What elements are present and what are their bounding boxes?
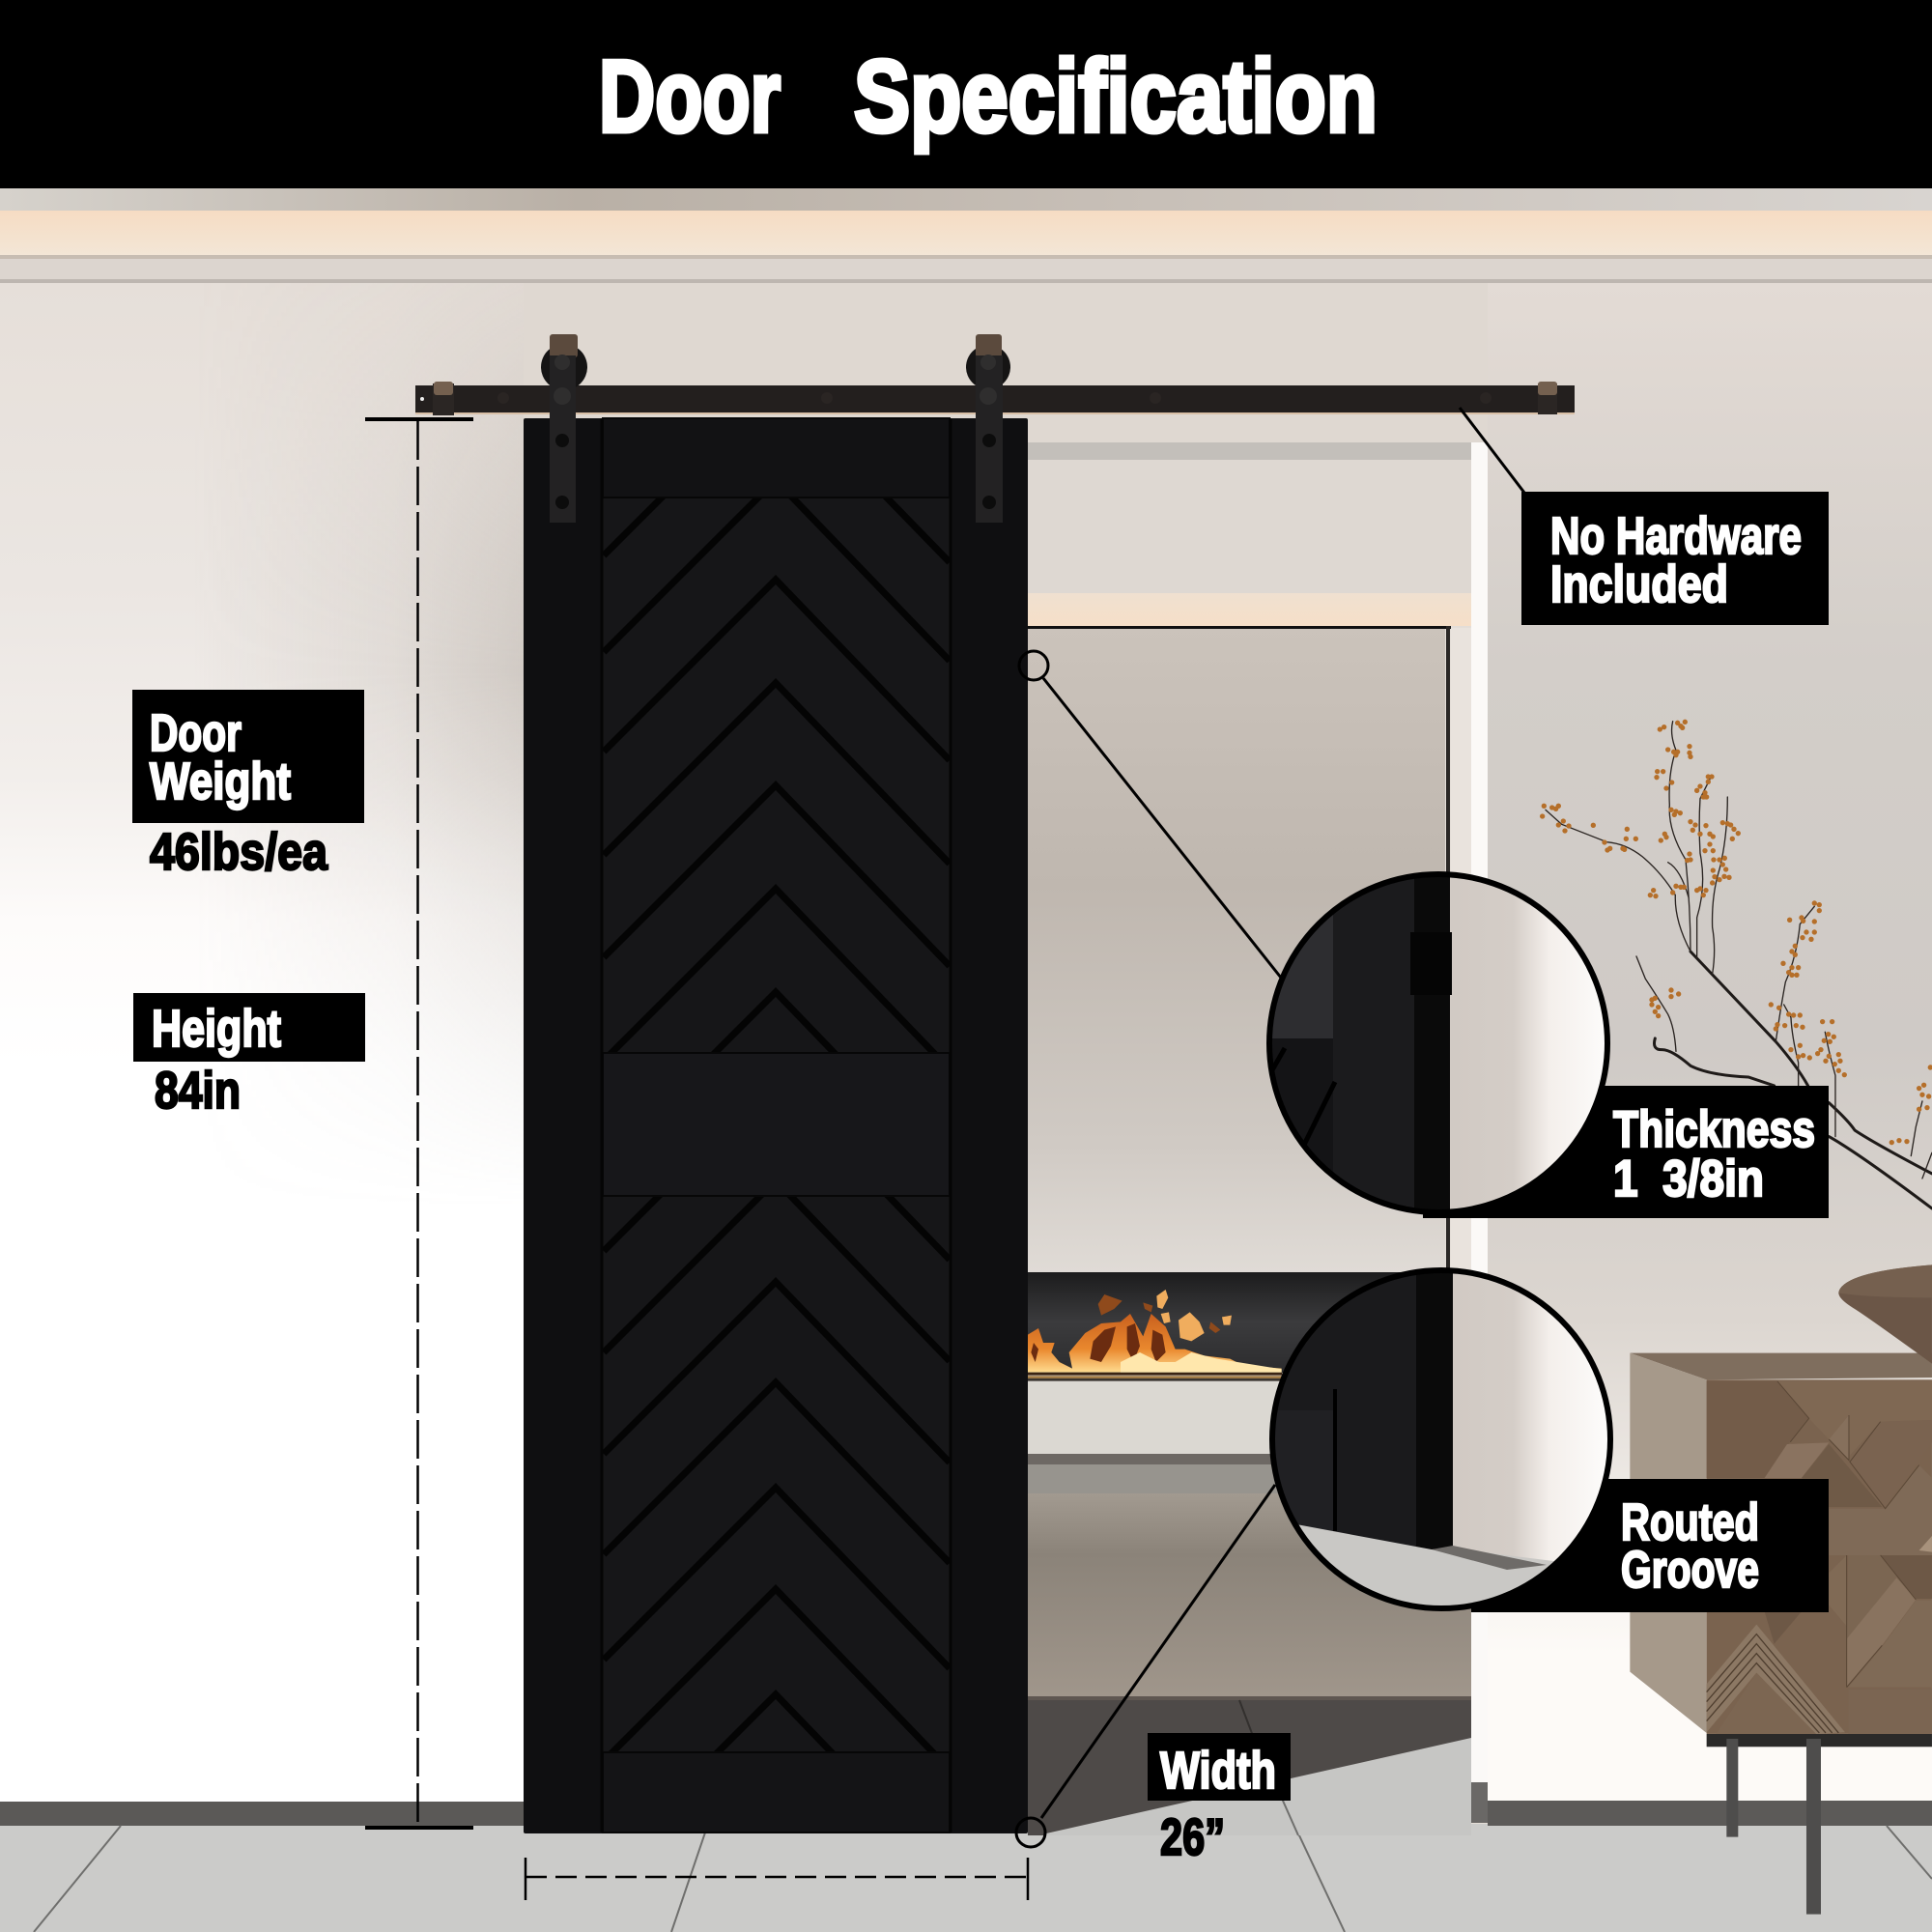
- legs: [1707, 1734, 1932, 1915]
- top chevron panel: [603, 498, 949, 1052]
- callout: height: [133, 993, 365, 1120]
- barn door track rail: [415, 382, 1575, 415]
- callout: thickness with magnifier: 1 3/8in: [1613, 1151, 1764, 1208]
- callout: width: 26”: [1160, 1808, 1225, 1866]
- callout: height: 84in: [155, 1062, 241, 1120]
- door rails: [603, 418, 950, 497]
- title bar: Specification: [854, 40, 1378, 154]
- vase: [1838, 1264, 1932, 1364]
- fireplace: [1028, 1272, 1453, 1381]
- bottom chevron panel: [603, 1197, 949, 1751]
- callout: routed groove with magnifier: Routed: [1621, 1493, 1759, 1551]
- width dimension line: [526, 1858, 1028, 1900]
- rug: [1028, 1493, 1471, 1697]
- floor: [0, 1801, 1932, 1932]
- callout: no hardware included: No Hardware: [1550, 507, 1802, 565]
- callout: door weight: Door: [150, 704, 242, 762]
- door panel: [524, 384, 1028, 1875]
- door stiles: [602, 418, 951, 1833]
- callout: door weight: [132, 690, 364, 881]
- callout: thickness with magnifier: [1019, 651, 1829, 1227]
- sideboard cabinet: [1630, 1264, 1932, 1915]
- title bar: Door: [599, 40, 781, 154]
- doorway interior view: [1028, 442, 1488, 1835]
- callout: door weight: 46lbs/ea: [150, 823, 328, 881]
- callout: routed groove with magnifier: Groove: [1621, 1541, 1759, 1599]
- hanger right: [966, 334, 1010, 523]
- hanger left: [541, 334, 587, 523]
- flames: [1028, 1290, 1282, 1381]
- callout: thickness with magnifier: Thickness: [1613, 1101, 1815, 1158]
- callout: routed groove with magnifier: [1016, 1256, 1829, 1847]
- callout: no hardware included: [1460, 408, 1829, 625]
- decorative branch with berries: [1543, 722, 1932, 1208]
- callout: door weight: Weight: [150, 753, 291, 810]
- callout: no hardware included: Included: [1550, 555, 1728, 613]
- callout: width: Width: [1160, 1742, 1276, 1800]
- callout: height: Height: [152, 1000, 281, 1058]
- height dimension line: [365, 417, 473, 1830]
- title bar: [0, 0, 1932, 188]
- callout: width: [1148, 1733, 1291, 1866]
